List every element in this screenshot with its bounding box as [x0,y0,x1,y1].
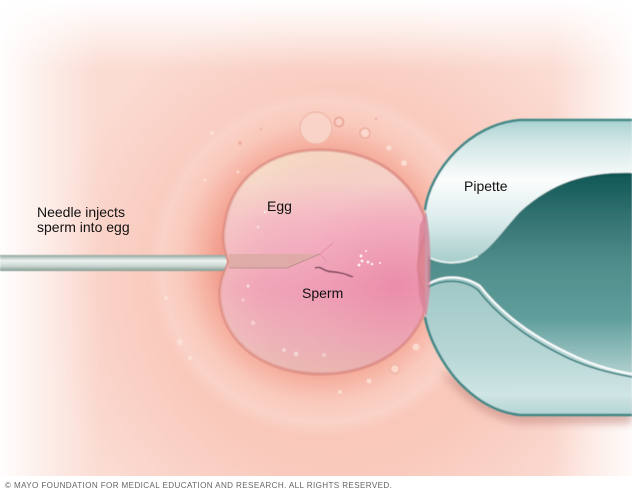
halo around egg [147,87,497,437]
sperm [315,267,353,277]
pipette [425,120,632,415]
pipette outline [425,120,632,415]
pipette cavity [428,173,632,374]
needle [0,255,227,271]
particles in halo [164,118,420,394]
label: egg: Egg [267,198,292,214]
pipette highlight lower [428,277,632,374]
copyright: © MAYO FOUNDATION FOR MEDICAL EDUCATION AND RESEARCH. ALL RIGHTS RESERVED. [5,481,392,490]
pipette lower wall [426,277,632,415]
egg speckles [242,210,381,357]
label: needle: Needle injects [37,204,125,220]
pipette highlight upper [430,256,478,263]
label: pipette: Pipette [464,178,508,194]
pipette upper wall [426,121,632,262]
egg [220,150,427,374]
injection mark [320,243,333,262]
needle tip inside egg [229,254,320,268]
label: sperm: Sperm [302,285,343,301]
polar body and bubbles [300,112,400,374]
pipette shadow [440,370,632,424]
egg edge over pipette [418,212,430,317]
infographic: needle injecting sperm into egg: sperm into egg [37,219,130,235]
